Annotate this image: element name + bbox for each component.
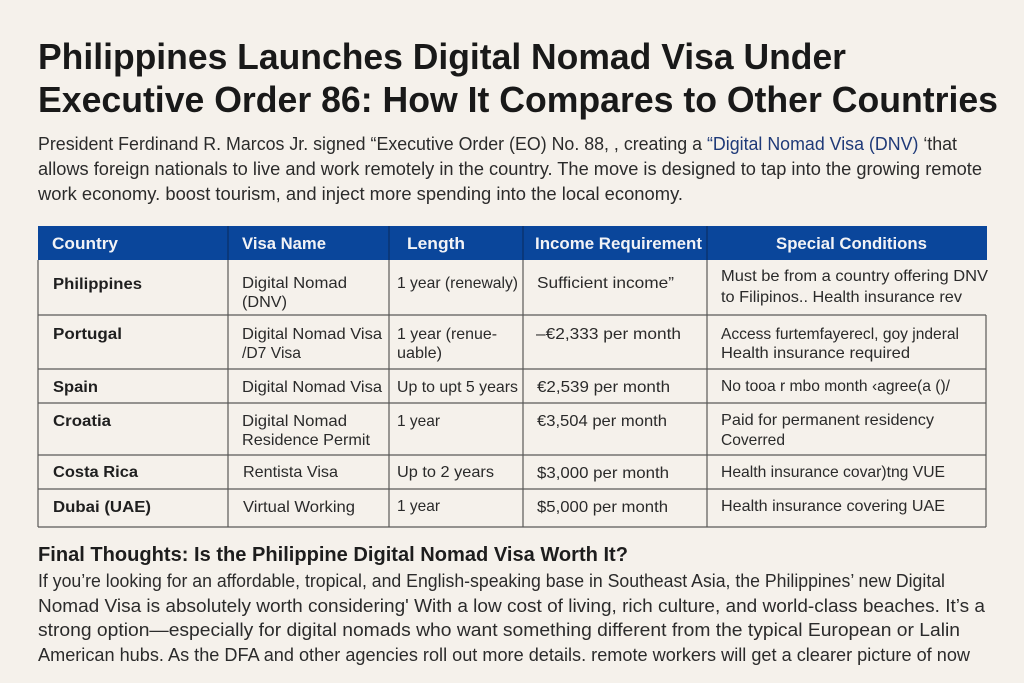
row: Spain bbox=[53, 378, 951, 396]
row: Portugal: Portugal bbox=[53, 326, 122, 343]
table header row: Visa Name bbox=[242, 234, 326, 253]
row: Dubai (UAE): 1 year bbox=[397, 498, 441, 515]
row: Philippines: 1 year (renewaly) bbox=[397, 275, 518, 292]
row: Portugal: Access furtemfayerecl, goy jnderal bbox=[721, 326, 959, 343]
row: Philippines bbox=[53, 268, 988, 311]
row: Philippines: Sufficient income” bbox=[537, 275, 674, 292]
row: Croatia: Residence Permit bbox=[242, 432, 371, 449]
row: Portugal: Health insurance required bbox=[721, 345, 910, 362]
row: Dubai (UAE): $5,000 per month bbox=[537, 499, 668, 516]
row: Portugal: /D7 Visa bbox=[242, 345, 301, 362]
row: Portugal: 1 year (renue- bbox=[397, 326, 497, 343]
final thoughts paragraph bbox=[38, 571, 986, 665]
row: Croatia: Paid for permanent residency bbox=[721, 412, 934, 429]
table header row: Length bbox=[407, 234, 465, 253]
row: Portugal: uable) bbox=[397, 345, 442, 362]
row: Croatia: 1 year bbox=[397, 413, 441, 430]
row: Spain: Spain bbox=[53, 379, 98, 396]
row: Philippines: Philippines bbox=[53, 276, 142, 293]
intro paragraph bbox=[37, 134, 982, 204]
row: Croatia: Digital Nomad bbox=[242, 413, 347, 430]
row: Costa Rica: Up to 2 years bbox=[397, 464, 494, 481]
title: Executive Order 86: How It Compares to Other Countries bbox=[38, 79, 998, 120]
row: Philippines: to Filipinos.. Health insurance rev bbox=[721, 289, 962, 306]
table header row bbox=[38, 226, 987, 260]
row: Croatia bbox=[53, 412, 934, 449]
row: Dubai (UAE): Health insurance covering UAE bbox=[721, 498, 945, 515]
intro paragraph: allows foreign nationals to live and work remotely in the country. The move is designed to tap into the growing remote bbox=[38, 159, 982, 179]
intro paragraph: work economy. boost tourism, and inject more spending into the local economy. bbox=[37, 184, 683, 204]
row: Philippines: Must be from a country offering DNV bbox=[721, 268, 988, 285]
row: Portugal bbox=[53, 326, 959, 362]
row: Costa Rica: Rentista Visa bbox=[243, 464, 338, 481]
final thoughts paragraph: American hubs. As the DFA and other agencies roll out more details. remote workers will get a clearer picture of now bbox=[38, 645, 971, 665]
final thoughts paragraph: Nomad Visa is absolutely worth considering' With a low cost of living, rich culture, and world-class beaches. It’s a bbox=[38, 596, 986, 616]
row: Croatia: Croatia bbox=[53, 413, 111, 430]
row: Costa Rica: Health insurance covar)tng VUE bbox=[721, 464, 945, 481]
comparison table bbox=[38, 226, 988, 527]
row: Spain: Up to upt 5 years bbox=[397, 379, 518, 396]
row: Costa Rica: $3,000 per month bbox=[537, 465, 669, 482]
final thoughts heading: Final Thoughts: Is the Philippine Digital Nomad Visa Worth It? bbox=[38, 544, 628, 566]
row: Croatia: €3,504 per month bbox=[537, 413, 667, 430]
row: Portugal: Digital Nomad Visa bbox=[242, 326, 382, 343]
row: Costa Rica: Costa Rica bbox=[53, 464, 138, 481]
row: Philippines: (DNV) bbox=[242, 294, 287, 311]
intro paragraph: President Ferdinand R. Marcos Jr. signed “Executive Order (EO) No. 88, , creating a “Digital Nomad Visa (DNV) ‘that bbox=[38, 134, 957, 154]
final thoughts paragraph: strong option—especially for digital nomads who want something different from the typical European or Lalin bbox=[38, 620, 960, 640]
row: Spain: No tooa r mbo month ‹agree(a ()/ bbox=[721, 378, 951, 395]
table header row: Income Requirement bbox=[535, 234, 702, 253]
table grid bbox=[38, 260, 986, 527]
row: Portugal: –€2,333 per month bbox=[536, 326, 681, 343]
table header row: Country bbox=[52, 234, 119, 253]
title bbox=[38, 36, 998, 120]
row: Spain: Digital Nomad Visa bbox=[242, 379, 382, 396]
row: Dubai (UAE): Dubai (UAE) bbox=[53, 499, 151, 516]
row: Costa Rica bbox=[53, 464, 945, 482]
row: Dubai (UAE) bbox=[53, 498, 945, 516]
row: Croatia: Coverred bbox=[721, 432, 785, 449]
row: Spain: €2,539 per month bbox=[537, 379, 670, 396]
table header row: Special Conditions bbox=[776, 234, 927, 253]
title: Philippines Launches Digital Nomad Visa Under bbox=[38, 36, 846, 77]
row: Philippines: Digital Nomad bbox=[242, 275, 347, 292]
row: Dubai (UAE): Virtual Working bbox=[243, 499, 355, 516]
final thoughts paragraph: If you’re looking for an affordable, tropical, and English-speaking base in Southeast Asia, the Philippines’ new Digital bbox=[38, 571, 945, 591]
